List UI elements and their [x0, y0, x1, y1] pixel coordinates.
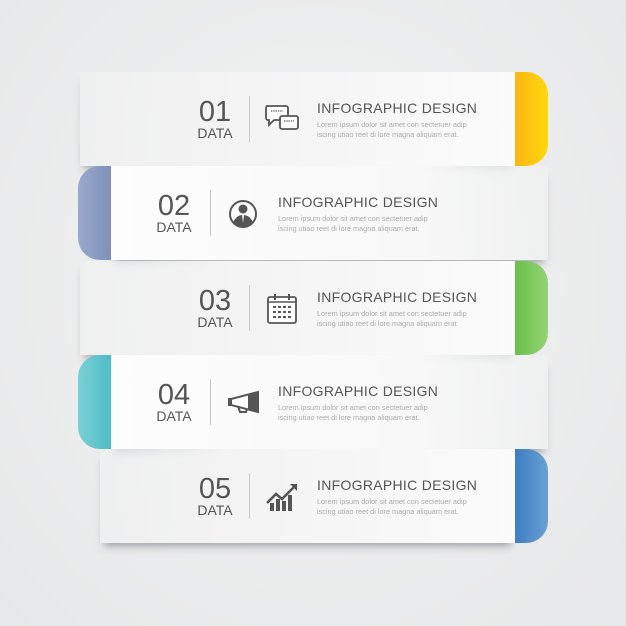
number 02: 02	[158, 190, 190, 222]
number 05	[197, 473, 233, 518]
text 1	[317, 100, 477, 139]
text 1: INFOGRAPHIC DESIGN	[317, 100, 477, 116]
card 3	[78, 261, 548, 362]
text 5: iscing utiao reet di lore magna aliquam erat.	[317, 507, 459, 516]
icon: growth chart	[266, 484, 297, 511]
text 3	[317, 289, 477, 328]
number 02	[156, 190, 192, 235]
card 1	[78, 72, 548, 172]
tab: teal	[78, 355, 111, 449]
text 2	[278, 194, 438, 233]
text 4	[278, 383, 438, 422]
icon: person	[229, 200, 257, 228]
number 01	[197, 96, 233, 141]
number 03: 03	[199, 285, 231, 317]
number 02: DATA	[156, 219, 192, 235]
card 2	[78, 166, 550, 268]
text 5: Lorem ipsum dolor sit amet con sectetuer adip	[317, 497, 467, 506]
text 3: INFOGRAPHIC DESIGN	[317, 289, 477, 305]
number 03: DATA	[197, 314, 233, 330]
number 03	[197, 285, 233, 330]
number 05: DATA	[197, 502, 233, 518]
icon: speech bubbles	[265, 105, 299, 130]
tab: green	[515, 261, 548, 355]
number 01: DATA	[197, 125, 233, 141]
number 04: 04	[158, 379, 190, 411]
tab: blue	[515, 449, 548, 543]
text 1: Lorem ipsum dolor sit amet con sectetuer adip	[317, 120, 467, 129]
text 3: Lorem ipsum dolor sit amet con sectetuer adip	[317, 309, 467, 318]
icon: calendar	[267, 294, 297, 324]
text 4: Lorem ipsum dolor sit amet con sectetuer adip	[278, 403, 428, 412]
card 4	[78, 355, 550, 456]
number 01: 01	[199, 96, 231, 128]
text 2: INFOGRAPHIC DESIGN	[278, 194, 438, 210]
card 5	[98, 449, 548, 552]
text 4: INFOGRAPHIC DESIGN	[278, 383, 438, 399]
text 5	[317, 477, 477, 516]
text 1: iscing utiao reet di lore magna aliquam erat.	[317, 130, 459, 139]
number 04: DATA	[156, 408, 192, 424]
icon: megaphone	[228, 390, 259, 414]
tab: slate blue	[78, 166, 111, 260]
number 05: 05	[199, 473, 231, 505]
number 04	[156, 379, 192, 424]
tab: yellow	[515, 72, 548, 166]
text 2: iscing utiao reet di lore magna aliquam erat.	[278, 224, 420, 233]
text 2: Lorem ipsum dolor sit amet con sectetuer adip	[278, 214, 428, 223]
text 4: iscing utiao reet di lore magna aliquam erat.	[278, 413, 420, 422]
text 5: INFOGRAPHIC DESIGN	[317, 477, 477, 493]
text 3: iscing utiao reet di lore magna aliquam erat.	[317, 319, 459, 328]
